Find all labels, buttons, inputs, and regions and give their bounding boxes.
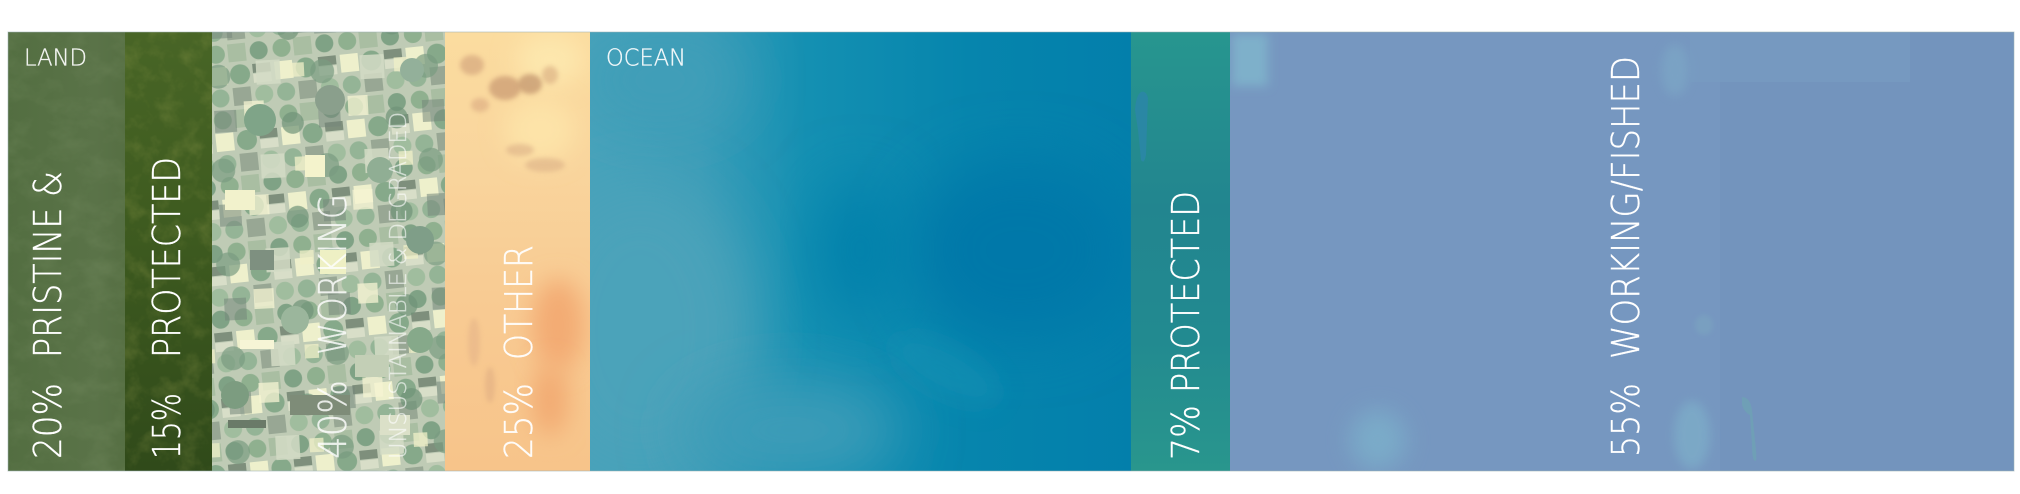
label: 20% PRISTINE &: PRISTINE & bbox=[26, 171, 70, 358]
icon: dark blue island patch bbox=[1135, 92, 1148, 162]
label: 55% WORKING/FISHED: 55% bbox=[1604, 383, 1648, 457]
icon: small island streak bbox=[1742, 397, 1756, 461]
label: 15% PROTECTED bbox=[145, 157, 189, 459]
label: 40% WORKING bbox=[317, 197, 347, 458]
label: 7% PROTECTED: 7% bbox=[1164, 405, 1208, 460]
label: 55% WORKING/FISHED bbox=[1610, 58, 1643, 454]
label: 7% PROTECTED: PROTECTED bbox=[1164, 191, 1208, 393]
label: LAND: LAND bbox=[24, 44, 87, 72]
panel: land protected bbox=[125, 32, 213, 471]
label: 40% WORKING: WORKING bbox=[311, 194, 355, 355]
label: 15% PROTECTED: PROTECTED bbox=[145, 157, 189, 358]
label: OCEAN: OCEAN bbox=[606, 44, 686, 72]
label: UNSUSTAINABLE & DEGRADED: UNSUSTAINABLE & DEGRADED bbox=[386, 112, 412, 459]
farmland large pivots bbox=[221, 58, 434, 435]
label: 40% WORKING: 40% bbox=[311, 380, 355, 459]
panel: ocean protected bbox=[1131, 32, 1231, 471]
label: 25% OTHER: 25% bbox=[497, 383, 541, 459]
panel: ocean working fished bbox=[1230, 32, 2014, 471]
label: 25% OTHER: OTHER bbox=[497, 245, 541, 360]
panel: land other desert bbox=[445, 32, 590, 471]
label: 7% PROTECTED bbox=[1170, 194, 1200, 458]
label: 20% PRISTINE &: 20% bbox=[26, 383, 70, 459]
label: 20% PRISTINE & bbox=[26, 171, 70, 459]
panel: ocean bbox=[590, 32, 1131, 471]
label: 55% WORKING/FISHED: WORKING/FISHED bbox=[1604, 56, 1648, 359]
label: 25% OTHER bbox=[503, 246, 533, 457]
panel: land pristine bbox=[8, 32, 125, 471]
label: 15% PROTECTED: 15% bbox=[145, 393, 189, 459]
panel: land working farmland bbox=[212, 32, 446, 471]
